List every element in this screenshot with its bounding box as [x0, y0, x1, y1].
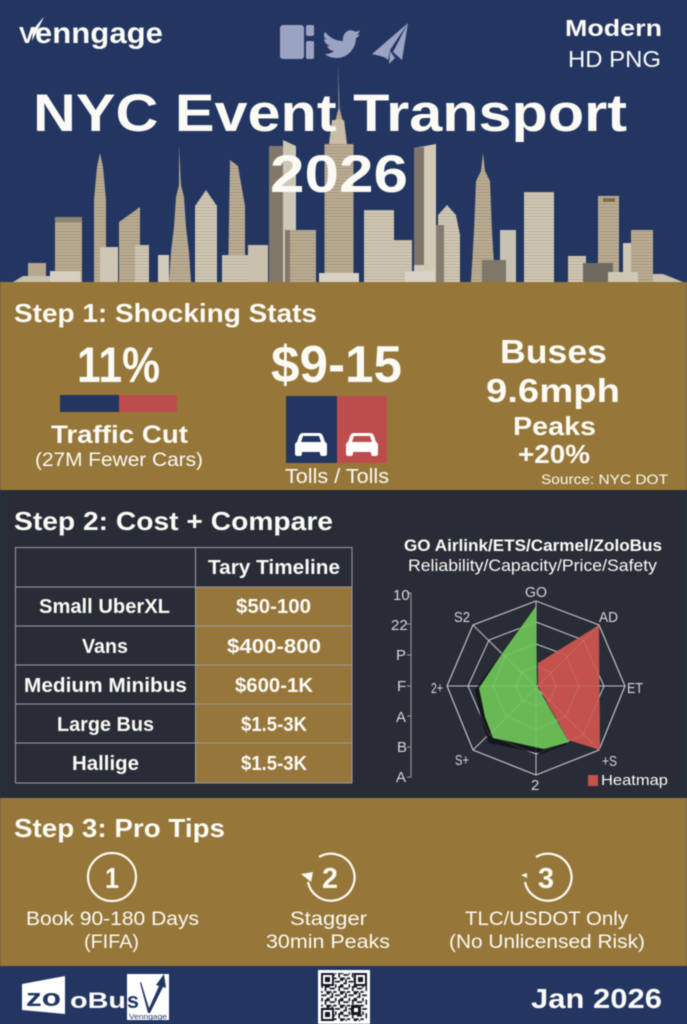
tip 2: 2: [322, 863, 338, 895]
radar labels: 2: [531, 777, 539, 794]
stat: tolls: $9-15: [271, 336, 402, 394]
radar chart: [431, 584, 643, 794]
stat: buses: [486, 333, 620, 469]
green series shadow: [475, 608, 567, 754]
panel: step 2 cost and compare: [0, 490, 687, 799]
radar labels: S2: [454, 609, 470, 626]
date: Jan 2026: [531, 983, 662, 1014]
legend: heatmap: Heatmap: [601, 772, 668, 789]
radar labels: [431, 584, 643, 794]
radar inner lines: [468, 622, 604, 754]
cost table: $400-800: [227, 636, 321, 658]
cost table: Tary Timeline: [208, 557, 340, 579]
cost table: Hallige: [72, 753, 139, 775]
tip 3: 3: [538, 863, 554, 895]
footer panel: [0, 966, 687, 1024]
icon: car red: [346, 433, 378, 456]
QR code: [318, 970, 370, 1024]
stat: traffic cut: 11%: [77, 337, 160, 393]
radar labels: AD: [599, 609, 618, 626]
stat: buses: Peaks: [513, 411, 596, 441]
scale axis: A: [396, 709, 406, 726]
logo: zoloBus: Venngage: [129, 1014, 167, 1021]
panel: step 1 shocking stats: [0, 282, 687, 490]
stat: tolls: [271, 336, 402, 488]
heading: step 1: Step 1: Shocking Stats: [14, 298, 317, 328]
badge: Modern HD PNG: [565, 15, 662, 72]
stat: traffic cut: Traffic Cut: [51, 421, 189, 449]
badge: Modern HD PNG: Modern: [565, 15, 662, 41]
scale axis: [391, 587, 411, 786]
green series: [479, 606, 569, 749]
tip 3: [449, 854, 645, 953]
cost table: $50-100: [236, 596, 311, 618]
title: [33, 84, 627, 204]
radar labels: ET: [627, 680, 643, 697]
heading: step 3: Step 3: Pro Tips: [14, 813, 225, 843]
tip 1: (FIFA): [84, 932, 139, 953]
source note: Source: NYC DOT: [541, 471, 668, 487]
stat: traffic cut: [35, 337, 203, 471]
header panel: [0, 0, 687, 283]
badge: Modern HD PNG: HD PNG: [568, 46, 661, 72]
title: NYC Event Transport: [33, 84, 627, 143]
radar labels: 2+: [431, 680, 443, 697]
cost table: $1.5-3K: [241, 714, 308, 736]
tip 3: TLC/USDOT Only: [465, 909, 629, 930]
stat: buses: 9.6mph: [486, 372, 620, 409]
social icons: [280, 23, 408, 64]
cost table: [15, 547, 352, 783]
tip 1: 1: [105, 863, 119, 895]
radar labels: GO: [525, 584, 547, 601]
icon: car navy: [295, 433, 327, 456]
logo: zoloBus: s: [127, 988, 139, 1013]
logo: zoloBus: [22, 974, 169, 1021]
scale axis: F: [397, 678, 406, 695]
scale axis: A: [396, 769, 406, 786]
scale axis: 22: [391, 617, 408, 634]
title: 2026: [270, 145, 408, 204]
tip 1: [26, 853, 199, 953]
radar labels: S+: [455, 752, 469, 769]
scale axis: B: [397, 739, 407, 756]
chart title: GO Airlink/ETS/Carmel/ZoloBus: [404, 536, 662, 555]
logo: zoloBus: oBu: [70, 988, 126, 1013]
tip 2: Stagger: [290, 909, 368, 930]
cost table: $1.5-3K: [241, 753, 308, 775]
red series: [538, 625, 600, 750]
radar labels: +S: [602, 753, 617, 770]
panel: step 3 pro tips: [0, 798, 687, 967]
stat: buses: Buses: [500, 333, 607, 370]
heading: step 2: Step 2: Cost + Compare: [14, 506, 333, 536]
logo: Venngage: Venngage: [19, 17, 163, 50]
skyline illustration: [13, 63, 683, 282]
cost table: Large Bus: [57, 714, 154, 736]
tip 3: (No Unlicensed Risk): [449, 932, 645, 953]
cost table: $600-1K: [235, 675, 314, 697]
stat: tolls: Tolls / Tolls: [285, 466, 389, 488]
tip 2: 30min Peaks: [266, 932, 390, 953]
tip 1: Book 90-180 Days: [26, 909, 199, 930]
logo: zoloBus: zo: [26, 985, 61, 1012]
radar grid: [447, 601, 625, 775]
scale axis: P: [396, 647, 406, 664]
chart title: [404, 536, 662, 575]
tip 2: [266, 854, 390, 953]
chart title: Reliability/Capacity/Price/Safety: [408, 556, 658, 575]
stat: buses: +20%: [518, 439, 590, 469]
stat: traffic cut: (27M Fewer Cars): [35, 450, 203, 471]
cost table: Vans: [82, 636, 128, 658]
cost table: Medium Minibus: [24, 675, 187, 697]
cost table: Small UberXL: [39, 596, 170, 618]
scale axis: 10: [393, 587, 410, 604]
